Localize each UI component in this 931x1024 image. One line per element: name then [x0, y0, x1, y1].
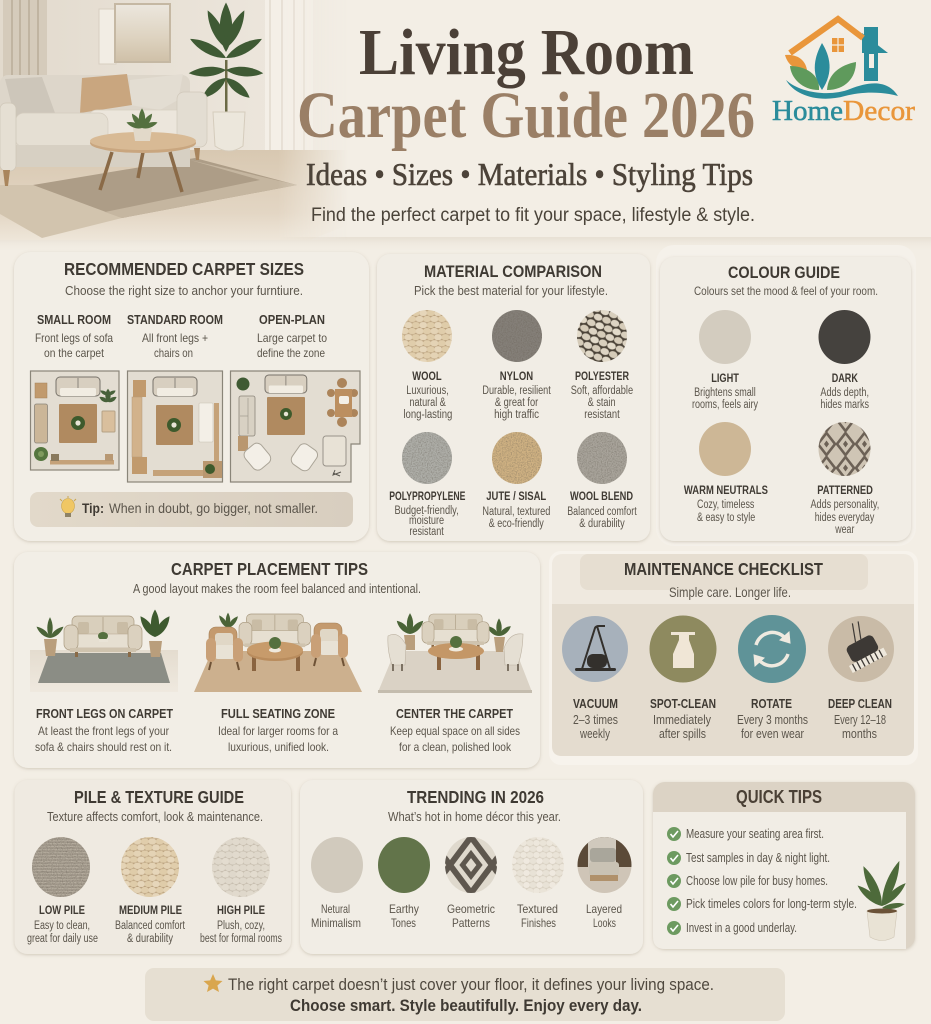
tip: underlay [667, 921, 797, 935]
swatch: light [692, 310, 758, 411]
swatch: polypropylene: POLYPROPYLENE [389, 489, 465, 503]
swatch: warm neutrals: WARM NEUTRALS [684, 483, 768, 497]
swatch: nylon: Durable, resilient [482, 385, 551, 397]
panel: material comparison [377, 254, 650, 541]
title: Carpet Guide 2026 [297, 79, 755, 152]
icon: potted plant [855, 859, 908, 940]
logo: HomeDecor: Decor [843, 95, 915, 127]
heading: CARPET PLACEMENT TIPS [171, 559, 368, 579]
swatch: wool blend: Balanced comfort [567, 506, 637, 518]
item: spot-clean: after spills [659, 727, 706, 741]
swatch: nylon: high traffic [494, 409, 539, 421]
swatch: polyester: Soft, affordable [571, 385, 633, 397]
icon: carpet brush [832, 616, 887, 673]
trend: geometric patterns: Patterns [452, 916, 490, 930]
caption: full seating zone: FULL SEATING ZONE [221, 706, 335, 721]
swatch: patterned: PATTERNED [817, 483, 873, 497]
swatch: polypropylene [389, 432, 465, 538]
swatch: nylon [482, 310, 551, 421]
floor plan: small room [30, 371, 119, 470]
tip: timeless colors: Pick timeles colors for long-term style. [686, 897, 857, 911]
coffee table and plant [90, 108, 196, 192]
swatch: warm neutrals: Cozy, timeless [697, 499, 755, 511]
floor plan: open-plan [230, 371, 360, 482]
swatch: polypropylene: resistant [409, 526, 444, 538]
tip bar: Tip: [82, 500, 104, 516]
logo: HomeDecor: Home [772, 95, 843, 127]
swatch: medium pile: Balanced comfort [115, 920, 186, 932]
column headings and descriptions [35, 312, 327, 360]
swatch: wool blend: & durability [579, 518, 625, 530]
swatch: polyester: & stain [588, 397, 616, 409]
caption: full seating zone: luxurious, unified look. [228, 740, 329, 754]
swatch: dark [818, 310, 870, 411]
swatch: medium pile: MEDIUM PILE [119, 903, 182, 917]
trend: neutral minimalism [311, 837, 363, 930]
intro text: Colours set the mood & feel of your room. [694, 284, 878, 298]
trend: neutral minimalism: Minimalism [311, 916, 361, 930]
item: spot-clean: SPOT-CLEAN [650, 697, 716, 711]
swatch: jute sisal: Natural, textured [482, 506, 550, 518]
swatch: light: Brightens small [694, 387, 756, 399]
caption: front legs on carpet: FRONT LEGS ON CARPET [36, 706, 173, 721]
panel: maintenance checklist [549, 551, 918, 765]
rug [0, 158, 297, 238]
icon: spray bottle [671, 632, 695, 668]
floor [0, 150, 348, 240]
swatch: dark: DARK [832, 371, 858, 385]
header room photo [0, 0, 348, 240]
heading: TRENDING IN 2026 [407, 787, 544, 807]
heading: MATERIAL COMPARISON [424, 263, 602, 281]
swatch: high pile: best for formal rooms [200, 933, 282, 945]
swatch: wool: WOOL [412, 369, 442, 383]
swatch: patterned: Adds personality, [810, 499, 879, 511]
swatch: patterned: wear [835, 524, 855, 536]
panel: pile and texture guide [14, 780, 291, 954]
caption: center the carpet: Keep equal space on all sides [390, 724, 520, 738]
column headings and descriptions: OPEN-PLAN [259, 312, 325, 327]
scene: full seating zone [194, 613, 362, 692]
intro text: What’s hot in home décor this year. [388, 810, 561, 824]
column headings and descriptions: define the zone [257, 346, 325, 360]
panel: carpet placement tips [14, 552, 540, 768]
swatch: jute sisal [482, 432, 550, 530]
swatch: wool: long-lasting [403, 409, 452, 421]
swatch: wool blend: WOOL BLEND [570, 489, 633, 503]
icon: rotate arrows [754, 632, 790, 666]
logo: HomeDecor [772, 19, 915, 127]
icon: vacuum [575, 626, 616, 671]
swatch: nylon: NYLON [500, 369, 533, 383]
intro text: Simple care. Longer life. [669, 584, 791, 600]
panel: quick tips [653, 782, 915, 949]
trend: textured finishes: Finishes [521, 916, 556, 930]
tip: low pile: Choose low pile for busy homes. [686, 874, 828, 888]
title [297, 16, 755, 152]
swatch: jute sisal: JUTE / SISAL [486, 489, 546, 503]
item: rotate: ROTATE [751, 697, 792, 711]
swatch: medium pile: & durability [127, 933, 173, 945]
swatch: light: LIGHT [711, 371, 739, 385]
column headings and descriptions: Front legs of sofa [35, 331, 113, 345]
column headings and descriptions: All front legs + [142, 331, 208, 345]
sofa [0, 74, 207, 186]
caption: center the carpet [390, 706, 520, 754]
tall plant [188, 2, 264, 151]
swatch: low pile: Easy to clean, [34, 920, 90, 932]
heading: COLOUR GUIDE [728, 264, 840, 282]
swatch: warm neutrals: & easy to style [697, 512, 755, 524]
swatch: low pile [27, 837, 98, 945]
trend: layered looks [577, 837, 632, 930]
column headings and descriptions: Large carpet to [257, 331, 327, 345]
swatch: dark: hides marks [820, 399, 869, 411]
swatch: medium pile [115, 837, 186, 945]
column headings and descriptions: STANDARD ROOM [127, 312, 223, 327]
intro text: Texture affects comfort, look & maintenance. [47, 810, 263, 824]
swatch: low pile: LOW PILE [39, 903, 85, 917]
swatch: high pile: HIGH PILE [217, 903, 265, 917]
heading: RECOMMENDED CARPET SIZES [64, 259, 304, 279]
intro text: A good layout makes the room feel balanced and intentional. [133, 582, 421, 596]
plant right [137, 610, 173, 657]
caption: full seating zone [218, 706, 338, 754]
panel: recommended carpet sizes [14, 252, 369, 541]
trend: layered looks: Looks [593, 916, 616, 930]
swatch: patterned: hides everyday [815, 512, 874, 524]
panel: colour guide [656, 245, 916, 546]
column headings and descriptions: SMALL ROOM [37, 312, 111, 327]
trend: earthy tones: Earthy [389, 902, 419, 916]
item: deep clean [828, 616, 894, 741]
panel: trending in 2026 [300, 780, 643, 954]
item: spot-clean [650, 616, 716, 741]
scene: center the carpet [378, 613, 532, 693]
heading: MAINTENANCE CHECKLIST [624, 559, 823, 579]
swatch: light: rooms, feels airy [692, 399, 758, 411]
tip: test samples: Test samples in day & night light. [686, 851, 830, 865]
swatch: patterned [810, 422, 879, 536]
item: rotate [737, 615, 808, 741]
item: rotate: for even wear [741, 727, 804, 741]
footer banner [145, 968, 785, 1021]
caption: center the carpet: CENTER THE CARPET [396, 706, 513, 721]
tip bar: When in doubt, go bigger, not smaller. [109, 500, 318, 516]
caption: full seating zone: Ideal for larger rooms for a [218, 724, 338, 738]
swatch: high pile: Plush, cozy, [217, 920, 265, 932]
tip bar [30, 492, 353, 527]
wall art [99, 4, 170, 64]
swatch: warm neutrals [684, 422, 768, 524]
tip: measure: Measure your seating area first. [686, 827, 824, 841]
swatch: wool blend [567, 432, 637, 530]
trend: geometric patterns: Geometric [447, 902, 495, 916]
trend: geometric patterns [445, 837, 497, 930]
swatch: wool: natural & [409, 397, 446, 409]
swatch: nylon: & great for [495, 397, 538, 409]
column headings and descriptions: on the carpet [44, 346, 105, 360]
intro text: Pick the best material for your lifestyle. [414, 284, 608, 298]
trend: textured finishes: Textured [517, 902, 558, 916]
swatch: wool [402, 310, 452, 421]
item: vacuum [562, 616, 628, 741]
tagline: Find the perfect carpet to fit your space, lifestyle & style. [311, 205, 755, 226]
icon: star [204, 974, 222, 992]
swatch: polyester [571, 310, 633, 421]
icon: light bulb [60, 496, 76, 517]
left curtain [3, 0, 47, 78]
item: vacuum: weekly [579, 727, 611, 741]
column headings and descriptions: chairs on [154, 346, 193, 360]
title: Living Room [359, 16, 694, 89]
swatch: polypropylene: Budget-friendly, [394, 505, 459, 517]
item: deep clean: Every 12–18 [834, 713, 886, 727]
trend: earthy tones: Tones [391, 916, 416, 930]
footer message: The right carpet doesn’t just cover your floor, it defines your living space. [228, 975, 714, 994]
plant left [35, 617, 65, 656]
swatch: jute sisal: & eco-friendly [489, 518, 544, 530]
caption: front legs on carpet [35, 706, 173, 754]
trend: neutral minimalism: Netural [321, 902, 350, 916]
item: vacuum: 2–3 times [573, 713, 618, 727]
item: deep clean: months [842, 727, 877, 741]
item: deep clean: DEEP CLEAN [828, 697, 892, 711]
caption: front legs on carpet: sofa & chairs should rest on it. [35, 740, 172, 754]
item: rotate: Every 3 months [737, 713, 808, 727]
item: spot-clean: Immediately [653, 713, 712, 727]
trend: earthy tones [378, 837, 430, 930]
right curtain [265, 0, 292, 150]
caption: front legs on carpet: At least the front legs of your [38, 724, 169, 738]
heading: QUICK TIPS [736, 787, 822, 807]
swatch: wool: Luxurious, [406, 385, 449, 397]
tip: underlay: Invest in a good underlay. [686, 921, 797, 935]
swatch: dark: Adds depth, [820, 387, 869, 399]
swatch: polyester: resistant [584, 409, 620, 421]
intro text: Choose the right size to anchor your furntiure. [65, 284, 303, 298]
trend: layered looks: Layered [586, 902, 622, 916]
heading: PILE & TEXTURE GUIDE [74, 787, 244, 807]
swatch: polyester: POLYESTER [575, 369, 629, 383]
swatch: low pile: great for daily use [27, 933, 98, 945]
floor plan: standard room [128, 371, 222, 482]
trend: textured finishes [512, 837, 564, 930]
footer call to action: Choose smart. Style beautifully. Enjoy every day. [290, 996, 642, 1015]
item: vacuum: VACUUM [573, 697, 618, 711]
subtitle: Ideas • Sizes • Materials • Styling Tips [306, 156, 753, 192]
scene: front legs on carpet [30, 610, 178, 692]
swatch: polypropylene: moisture [409, 515, 444, 527]
header band shading [0, 237, 931, 251]
swatch: high pile [200, 837, 282, 945]
caption: center the carpet: for a clean, polished look [399, 740, 512, 754]
